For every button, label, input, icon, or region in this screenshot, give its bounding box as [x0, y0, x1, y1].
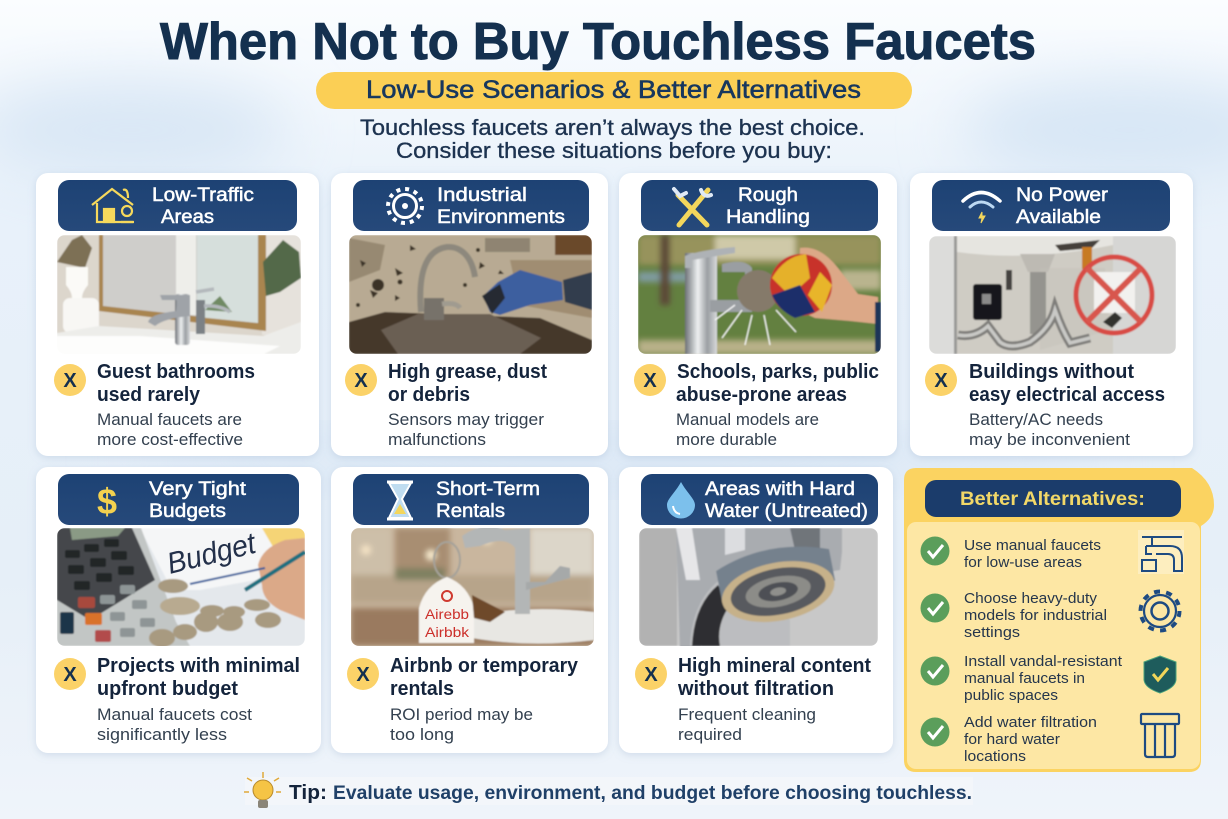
- text: high mineral content: Frequent cleaning: [678, 706, 816, 724]
- item: manual faucets: Use manual faucets: [964, 538, 1101, 554]
- item: vandal-resistant: Install vandal-resistant: [964, 654, 1122, 670]
- text: high mineral content: without filtration: [677, 678, 834, 700]
- text: airbnb rentals: too long: [390, 726, 454, 744]
- icon: water drop: [667, 482, 695, 518]
- heading: industrial environments: Environments: [437, 207, 565, 228]
- status icon: X: [934, 370, 948, 392]
- text: schools and parks: more durable: [676, 431, 777, 449]
- text: grease and dust: Sensors may trigger: [388, 411, 545, 429]
- icon: wireless power: [963, 192, 1000, 223]
- heading: low-traffic areas: Low-Traffic: [152, 185, 254, 206]
- panel: very tight budgets: [36, 467, 321, 753]
- text: grease and dust: [388, 361, 547, 449]
- text: airbnb rentals: Airbnb or temporary: [390, 655, 579, 677]
- text: schools and parks: abuse-prone areas: [676, 384, 847, 406]
- icon: house: [92, 189, 134, 222]
- panel: industrial environments: [331, 173, 608, 456]
- panel: better alternatives: [904, 468, 1214, 772]
- text: grease and dust: High grease, dust: [388, 361, 547, 383]
- tip banner: [244, 772, 973, 808]
- item: heavy-duty models: settings: [964, 625, 1020, 641]
- panel: short-term rentals: [331, 467, 608, 753]
- heading: hard water: [641, 474, 878, 525]
- tip banner: Evaluate usage, environment, and budget before choosing touchless.: [333, 782, 972, 804]
- heading: industrial environments: [353, 180, 589, 231]
- photo: rental key tag by faucet: [351, 526, 594, 646]
- text: airbnb rentals: rentals: [390, 678, 454, 700]
- item: water filtration: [920, 714, 1179, 765]
- text: buildings without power: Battery/AC needs: [969, 411, 1103, 429]
- text: guest bathrooms: used rarely: [97, 384, 201, 406]
- status icon: [345, 364, 377, 396]
- icon: water filter: [1141, 714, 1179, 757]
- status icon: [54, 658, 86, 690]
- item: manual faucets: for low-use areas: [964, 555, 1082, 571]
- icon: gear: [1140, 592, 1180, 630]
- item: manual faucets: [920, 530, 1184, 574]
- heading: low-traffic areas: [58, 180, 297, 231]
- text: buildings without power: may be inconvenient: [969, 431, 1130, 449]
- photo: under-sink plumbing with crossed outlet: [929, 236, 1176, 354]
- heading: low-traffic areas: Areas: [161, 207, 214, 228]
- text: schools and parks: Manual models are: [676, 411, 819, 429]
- text: minimal budget projects: significantly less: [97, 726, 227, 744]
- photo: greasy industrial sink: [349, 235, 592, 354]
- text: high mineral content: [677, 655, 871, 744]
- heading: very tight budgets: [58, 474, 299, 525]
- tip banner: Tip:: [289, 782, 327, 804]
- status icon: X: [644, 664, 658, 686]
- item: water filtration: for hard water: [964, 732, 1060, 748]
- item: heavy-duty models: [920, 591, 1180, 641]
- text: buildings without power: easy electrical access: [969, 384, 1165, 406]
- text: grease and dust: or debris: [388, 384, 470, 406]
- status icon: X: [63, 370, 77, 392]
- item: vandal-resistant: [920, 654, 1176, 704]
- text: guest bathrooms: more cost-effective: [97, 431, 243, 449]
- text: minimal budget projects: [97, 655, 300, 744]
- heading: rough handling: [641, 180, 878, 231]
- text: airbnb rentals: [390, 655, 579, 744]
- status icon: [925, 364, 957, 396]
- status icon: [54, 364, 86, 396]
- status icon: [635, 658, 667, 690]
- heading: hard water: Areas with Hard: [705, 479, 855, 500]
- status icon: X: [354, 370, 368, 392]
- icon: crossed wrench and screwdriver: [674, 189, 711, 225]
- status icon: X: [63, 664, 77, 686]
- text: schools and parks: [676, 361, 879, 449]
- subtitle banner: [316, 72, 912, 109]
- text: buildings without power: [969, 361, 1165, 449]
- photo: rental key tag by faucet: Airbbk: [425, 624, 470, 640]
- photo: calculator, coins and budget note: [57, 527, 305, 647]
- heading: rough handling: Handling: [726, 207, 810, 228]
- status icon: [347, 658, 379, 690]
- intro text: [360, 115, 865, 163]
- status icon: X: [643, 370, 657, 392]
- heading: industrial environments: Industrial: [437, 185, 527, 206]
- title: When Not to Buy Touchless Faucets: [160, 13, 1036, 71]
- heading: short-term rentals: Rentals: [436, 501, 505, 522]
- item: water filtration: locations: [964, 749, 1026, 765]
- heading: hard water: Water (Untreated): [705, 501, 868, 522]
- icon: hourglass: [387, 482, 413, 519]
- text: buildings without power: Buildings without: [969, 361, 1134, 383]
- heading: better alternatives: [925, 480, 1181, 517]
- photo: rental key tag by faucet: Airebb: [425, 606, 469, 622]
- item: vandal-resistant: manual faucets in: [964, 671, 1085, 687]
- text: airbnb rentals: ROI period may be: [390, 706, 533, 724]
- text: minimal budget projects: Manual faucets cost: [97, 706, 252, 724]
- item: water filtration: Add water filtration: [964, 715, 1097, 731]
- intro text: Touchless faucets aren’t always the best choice.: [360, 115, 865, 140]
- text: guest bathrooms: Manual faucets are: [97, 411, 242, 429]
- heading: no power available: [932, 180, 1170, 231]
- panel: low-traffic areas: [36, 173, 319, 456]
- item: vandal-resistant: public spaces: [964, 688, 1058, 704]
- status icon: X: [356, 664, 370, 686]
- photo: mineral-crusted aerator: [639, 528, 878, 650]
- heading: short-term rentals: [353, 474, 589, 525]
- heading: no power available: Available: [1016, 207, 1101, 228]
- icon: light bulb: [244, 772, 281, 808]
- icon: shield: [1144, 656, 1176, 693]
- heading: short-term rentals: Short-Term: [436, 479, 540, 500]
- text: high mineral content: High mineral content: [678, 655, 871, 677]
- status icon: [634, 364, 666, 396]
- text: grease and dust: malfunctions: [388, 431, 486, 449]
- text: guest bathrooms: [97, 361, 255, 449]
- panel: hard water: [619, 467, 893, 753]
- text: schools and parks: Schools, parks, public: [677, 361, 879, 383]
- icon: dollar sign: $: [97, 481, 117, 522]
- text: minimal budget projects: upfront budget: [97, 678, 238, 700]
- icon: faucet: [1138, 530, 1184, 574]
- panel: no power available: [910, 173, 1193, 456]
- photo: ball hitting outdoor faucet: [638, 235, 881, 354]
- heading: very tight budgets: Budgets: [149, 501, 226, 522]
- text: minimal budget projects: Projects with minimal: [97, 655, 300, 677]
- text: high mineral content: required: [678, 726, 742, 744]
- heading: very tight budgets: Very Tight: [149, 479, 247, 500]
- photo: calculator, coins and budget note: Budget: [164, 527, 261, 581]
- icon: gear: [388, 189, 422, 223]
- intro text: Consider these situations before you buy:: [396, 138, 832, 163]
- heading: no power available: No Power: [1016, 185, 1109, 206]
- item: heavy-duty models: Choose heavy-duty: [964, 591, 1098, 607]
- subtitle banner: Low-Use Scenarios & Better Alternatives: [366, 76, 861, 104]
- panel: rough handling: [619, 173, 897, 456]
- item: heavy-duty models: models for industrial: [964, 608, 1107, 624]
- text: guest bathrooms: Guest bathrooms: [97, 361, 255, 383]
- photo: guest bathroom sink: [57, 235, 301, 354]
- heading: rough handling: Rough: [738, 185, 798, 206]
- heading: better alternatives: Better Alternatives:: [960, 489, 1145, 510]
